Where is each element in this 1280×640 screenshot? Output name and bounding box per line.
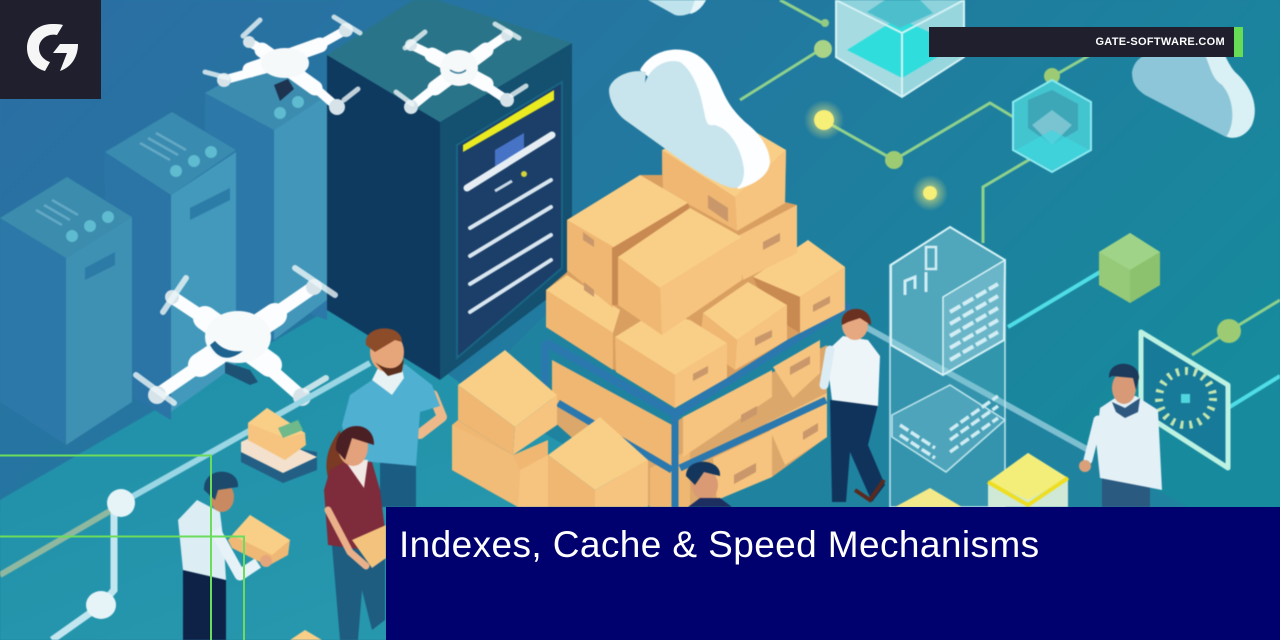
drone: top left <box>205 17 360 115</box>
cloud top right <box>1132 31 1255 138</box>
small cloud at top edge <box>648 0 706 16</box>
shelf frame <box>545 305 850 507</box>
person: woman with red shirt <box>324 426 386 640</box>
person: man in white shirt <box>1079 364 1162 507</box>
upper boxes <box>546 120 845 408</box>
heading: Indexes, Cache & Speed Mechanisms <box>399 524 1039 565</box>
title panel <box>386 507 1280 640</box>
dial screen <box>1141 332 1228 468</box>
cloud on stack <box>609 50 770 189</box>
person: man holding parcel <box>178 472 290 640</box>
cart with parcel <box>241 408 317 483</box>
drones <box>136 17 526 406</box>
glass cube: middle <box>1013 80 1091 172</box>
person: boy at shelf <box>686 462 732 507</box>
logo block <box>0 0 101 99</box>
drone: lower <box>136 268 335 406</box>
glass cube: top right <box>836 0 964 97</box>
person: man in teal shirt <box>342 328 442 507</box>
small box at bottom <box>290 630 322 640</box>
loose boxes left <box>452 350 648 507</box>
shelf lower boxes <box>552 340 827 507</box>
parcel stack on shelf <box>452 120 850 507</box>
main server rack <box>327 0 572 380</box>
glass cubes <box>836 0 1160 507</box>
website banner <box>929 27 1243 57</box>
server racks, light <box>0 55 327 445</box>
glass tower <box>890 227 1005 507</box>
drone: top right <box>396 24 526 114</box>
conveyor light lines and nodes <box>0 363 370 640</box>
yellow cube <box>988 453 1068 507</box>
person: woman at shelf <box>824 309 885 502</box>
connector lines <box>740 0 1280 452</box>
website banner: GATE-SOFTWARE.COM <box>1095 36 1225 48</box>
small yellow cube <box>895 488 962 507</box>
glowing nodes <box>804 100 948 211</box>
green cube <box>1099 233 1160 303</box>
